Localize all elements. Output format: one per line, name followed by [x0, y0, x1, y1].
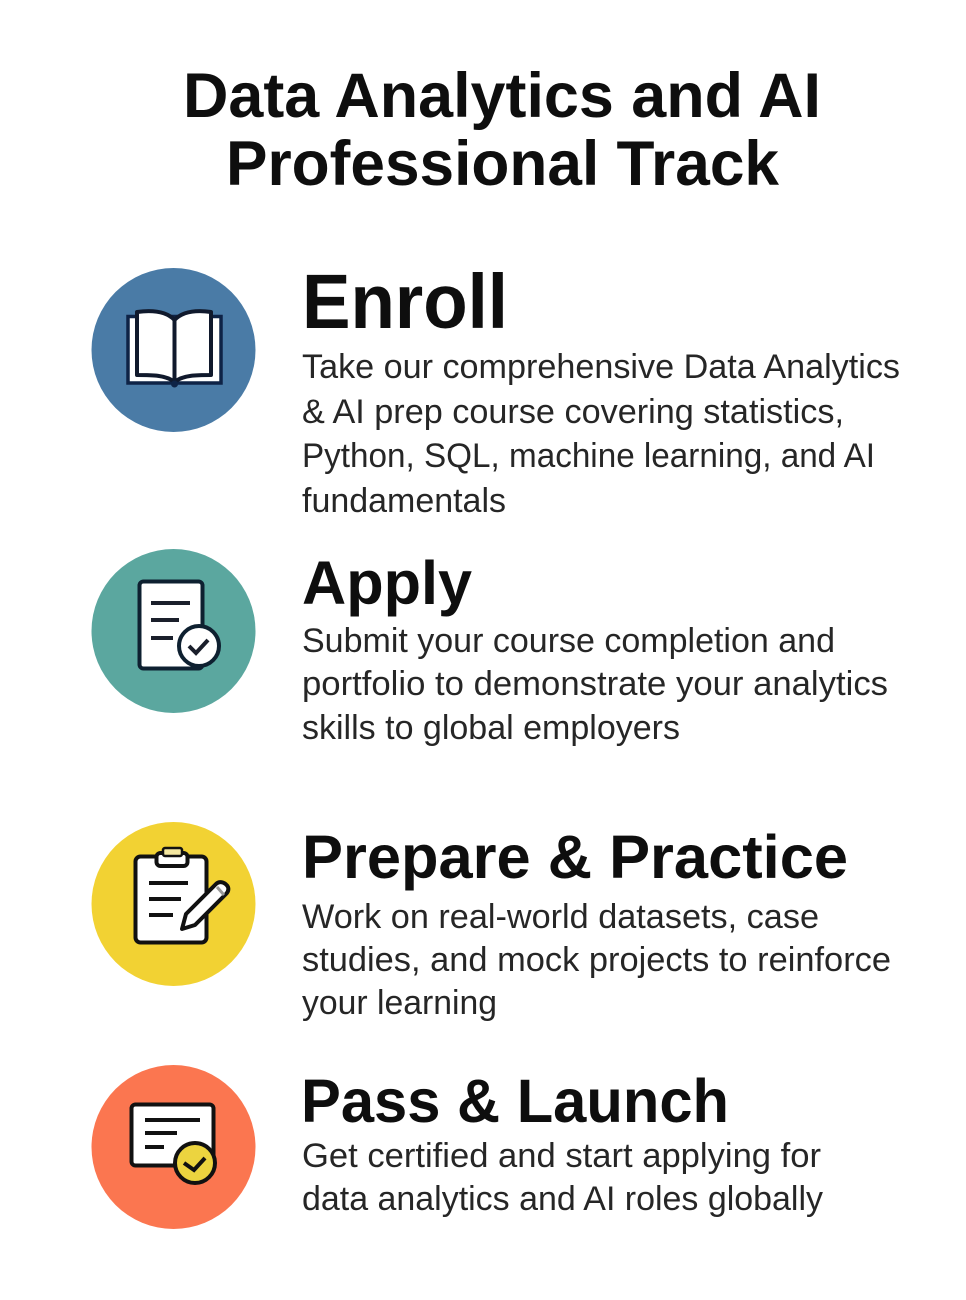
icon: certificate with check: [92, 1065, 256, 1229]
step 2: apply: [92, 549, 888, 747]
text: enroll description: & AI prep course covering statistics,: [302, 393, 844, 431]
text: enroll description: Python, SQL, machine learning, and AI: [302, 437, 875, 475]
text: pass description: Get certified and start applying for: [302, 1137, 821, 1175]
text: apply description: [302, 622, 888, 747]
text: prepare description: studies, and mock projects to reinforce: [302, 941, 891, 979]
text: prepare description: your learning: [302, 984, 497, 1022]
text: pass description: data analytics and AI roles globally: [302, 1180, 823, 1218]
text: enroll description: fundamentals: [302, 482, 506, 520]
text: enroll description: [302, 348, 900, 520]
heading: prepare and practice: Prepare & Practice: [302, 823, 848, 891]
icon: open book: [92, 268, 256, 432]
title: Data Analytics and AI: [183, 61, 821, 131]
text: apply description: skills to global employers: [302, 709, 680, 747]
text: pass description: [302, 1137, 823, 1218]
text: prepare description: [302, 898, 891, 1022]
text: enroll description: Take our comprehensive Data Analytics: [302, 348, 900, 386]
heading: pass and launch: Pass & Launch: [301, 1067, 729, 1135]
text: apply description: Submit your course completion and: [302, 622, 835, 660]
icon: clipboard with pencil: [92, 822, 256, 986]
heading: enroll: Enroll: [302, 259, 508, 345]
heading: apply: Apply: [302, 549, 472, 617]
title: [183, 61, 821, 199]
step 4: pass and launch: [92, 1065, 823, 1229]
title: Professional Track: [226, 129, 780, 199]
step 3: prepare and practice: [92, 822, 891, 1022]
icon: document with check: [92, 549, 256, 713]
text: apply description: portfolio to demonstrate your analytics: [302, 665, 888, 703]
text: prepare description: Work on real-world datasets, case: [302, 898, 819, 936]
step 1: enroll: [92, 259, 900, 520]
